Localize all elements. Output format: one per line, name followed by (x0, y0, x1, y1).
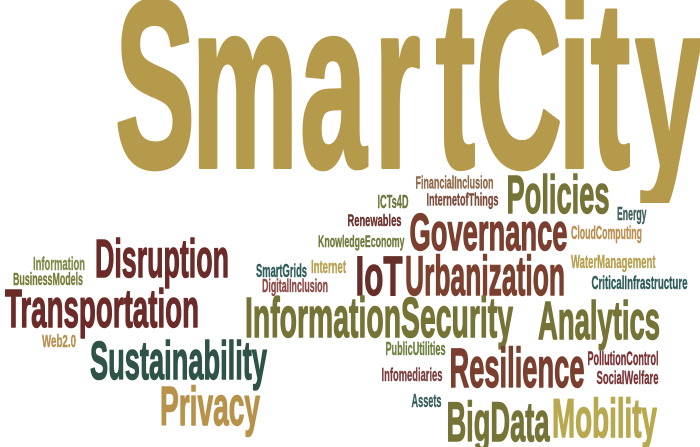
word: InternetofThings: InternetofThings (426, 190, 499, 210)
word: PublicUtilities: PublicUtilities (386, 339, 446, 359)
word: Transportation: Transportation (5, 279, 199, 339)
word: SmartGrids: SmartGrids (256, 261, 307, 281)
word: Internet: Internet (311, 257, 346, 277)
word: Sustainability: Sustainability (90, 331, 267, 391)
word cloud: Disruption (95, 229, 229, 289)
word: FinancialInclusion: FinancialInclusion (416, 172, 494, 192)
word: Information: Information (33, 254, 85, 274)
word: Web2.0: Web2.0 (42, 331, 76, 351)
word: Privacy: Privacy (160, 375, 260, 437)
word: KnowledgeEconomy: KnowledgeEconomy (318, 232, 405, 251)
word: BusinessModels: BusinessModels (13, 269, 83, 289)
word: Assets: Assets (412, 391, 442, 411)
word: Infomediaries: Infomediaries (382, 365, 442, 385)
word cloud: DigitalInclusion (262, 276, 328, 296)
word: Renewables: Renewables (348, 211, 402, 230)
word cloud: Energy (617, 204, 646, 224)
word: ICTs4D: ICTs4D (378, 192, 408, 212)
word: IoT: IoT (356, 244, 402, 307)
